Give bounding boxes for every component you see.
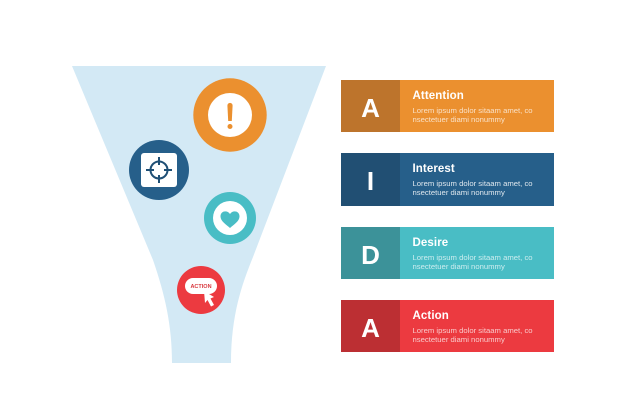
letter tab A (341, 300, 400, 352)
panel: desire (341, 227, 554, 279)
text block: Lorem ipsum dolor sitaam amet, co (412, 252, 533, 262)
text block (412, 178, 533, 197)
text block (412, 252, 533, 271)
text block: Lorem ipsum dolor sitaam amet, co (412, 106, 533, 114)
heading: Action (412, 310, 449, 322)
text block: nsectetuer diami nonummy (412, 188, 505, 197)
text block (412, 106, 533, 124)
text block: nsectetuer diami nonummy (412, 335, 505, 344)
letter tab A: A (361, 93, 380, 123)
icon: interest target (129, 140, 189, 200)
text block: nsectetuer diami nonummy (412, 262, 505, 271)
text block: Lorem ipsum dolor sitaam amet, co (412, 326, 533, 334)
icon: attention (193, 78, 267, 152)
heading: Desire (412, 237, 448, 249)
letter tab I (341, 153, 400, 206)
panel: action (341, 300, 554, 352)
text block: nsectetuer diami nonummy (412, 115, 505, 124)
cursor (204, 291, 214, 306)
panel: interest (341, 153, 554, 206)
button label: ACTION (190, 284, 212, 290)
letter tab D (341, 227, 400, 279)
icon: action button (177, 266, 225, 314)
text block: Lorem ipsum dolor sitaam amet, co (412, 178, 533, 188)
letter tab I: I (367, 166, 374, 196)
funnel shape (72, 66, 326, 363)
heading: Interest (412, 163, 455, 175)
icon: desire heart (204, 192, 256, 244)
letter tab A: A (361, 313, 380, 343)
text block (412, 326, 533, 344)
letter tab D: D (361, 240, 380, 270)
heading: Attention (412, 90, 464, 102)
panel: attention (341, 80, 554, 132)
letter tab A (341, 80, 400, 132)
